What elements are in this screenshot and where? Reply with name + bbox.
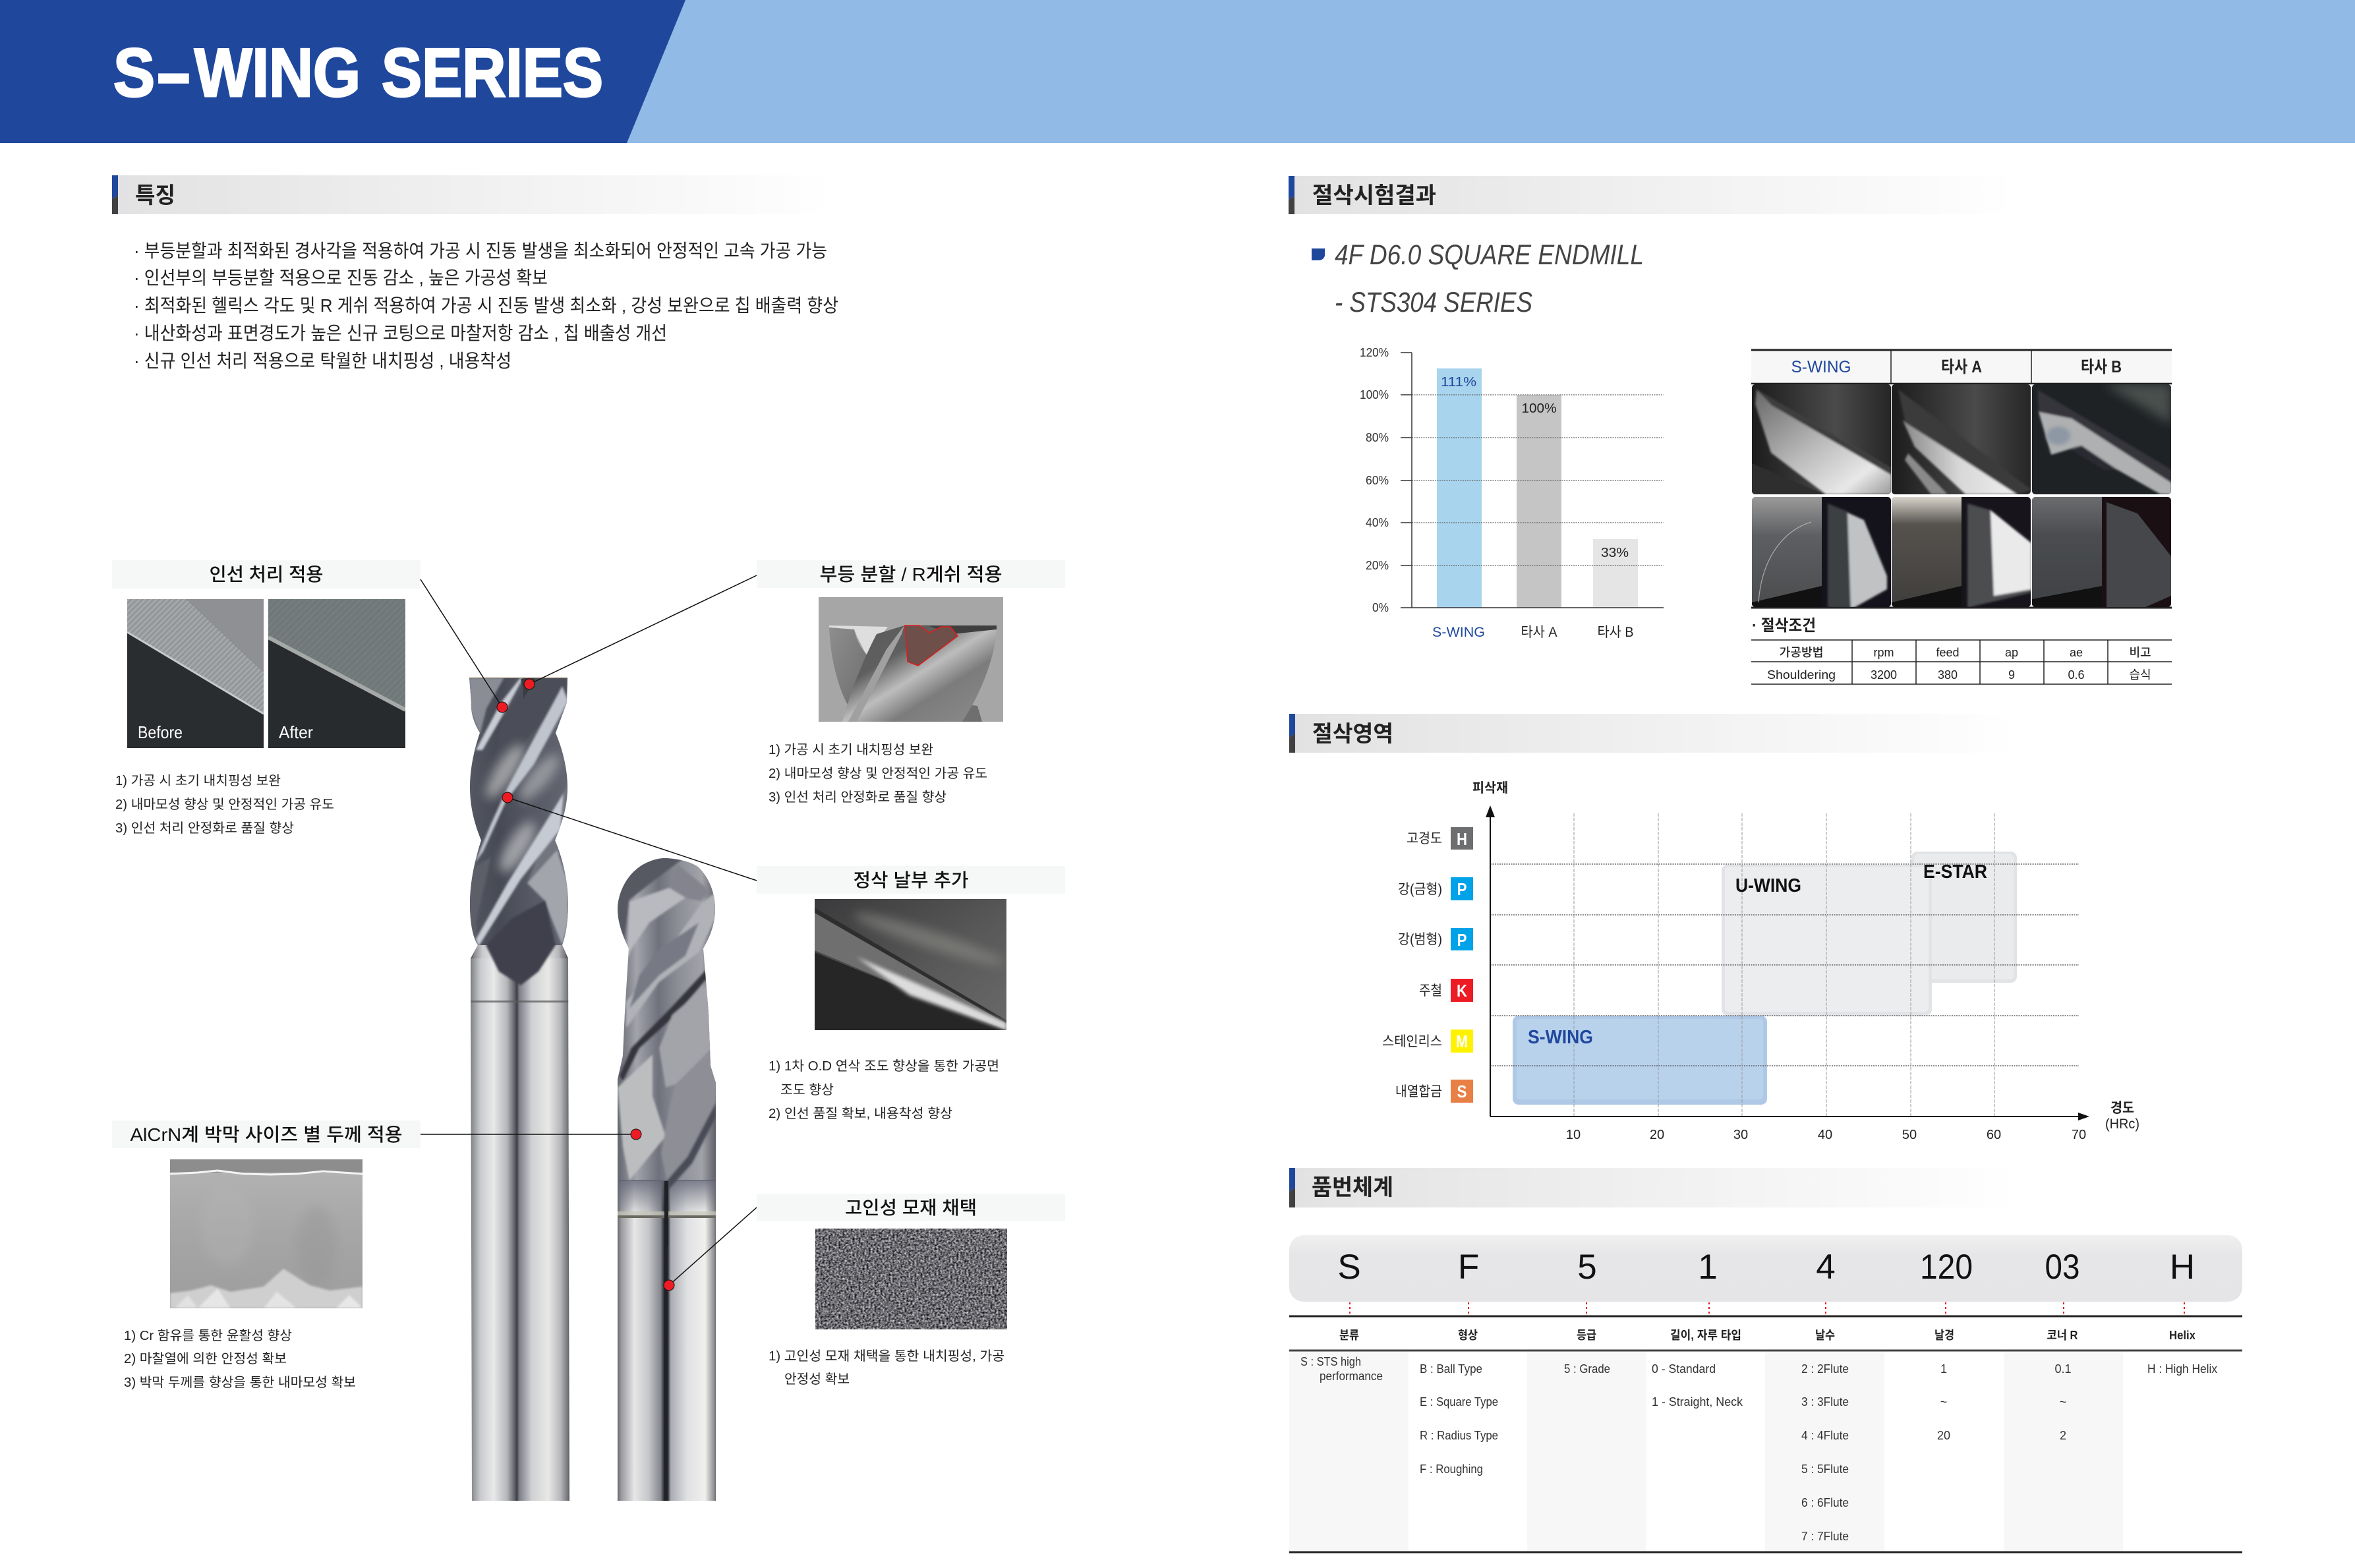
text: substrate benefits: [769, 1349, 1004, 1387]
part number table: Helix: [2169, 1329, 2195, 1342]
text: edge treatment benefits: 3) 인선 처리 안정화로 품질 향상: [115, 821, 294, 836]
heading: cutting test results: [1289, 176, 2014, 214]
part number table: 0 - Standard: [1652, 1362, 1716, 1376]
heading: features: [112, 175, 830, 214]
bar chart: 111%: [1441, 375, 1476, 390]
part number table: [1289, 1316, 2242, 1552]
material badges: [1451, 827, 1473, 1103]
part number code bar: [1289, 1235, 2242, 1302]
title: SERIES: [382, 35, 603, 111]
callout heading: unequal division: 부등 분할 / R게쉬 적용: [820, 564, 1002, 585]
red connector lines: [1350, 1302, 2184, 1316]
material badges: P: [1457, 879, 1467, 899]
hardness scale: 50: [1902, 1128, 1917, 1142]
leader lines and red markers: [421, 575, 757, 1291]
hardness scale: 60: [1987, 1128, 2001, 1142]
part number table: 길이, 자루 타입: [1670, 1329, 1741, 1342]
text: finishing edge benefits: 1) 1차 O.D 연삭 조도 향상을 통한 가공면: [769, 1059, 999, 1074]
material labels: 고경도: [1407, 831, 1442, 846]
feature bullet list: · 부등분할과 최적화된 경사각을 적용하여 가공 시 진동 발생을 최소화되어 안정적인 고속 가공 가능: [134, 241, 827, 261]
part number table: 날경: [1934, 1329, 1954, 1342]
bar chart: 20%: [1366, 559, 1389, 572]
image: square end mill: [468, 676, 571, 1502]
material labels: 스테인리스: [1382, 1034, 1442, 1049]
header banner: [0, 0, 2355, 143]
text: unequal division benefits: 3) 인선 처리 안정화로 품질 향상: [769, 790, 946, 805]
image: 3D model with highlighted gash: [819, 597, 1003, 722]
feature bullet list: · 인선부의 부등분할 적용으로 진동 감소 , 높은 가공성 확보: [134, 268, 548, 288]
text: edge treatment benefits: 1) 가공 시 초기 내치핑성 보완: [115, 773, 281, 788]
bar chart: 120%: [1360, 346, 1389, 359]
photo: before: [127, 599, 264, 748]
label: before: Before: [138, 722, 183, 742]
text: coating benefits: 2) 마찰열에 의한 안정성 확보: [124, 1351, 287, 1366]
part number table: 날수: [1815, 1329, 1835, 1342]
bar chart: 60%: [1366, 474, 1389, 487]
range: E-STAR box: [1911, 852, 2017, 983]
text: finishing edge benefits: 2) 인선 품질 확보, 내용착성 향상: [769, 1106, 952, 1121]
feature bullet list: · 최적화된 헬릭스 각도 및 R 게쉬 적용하여 가공 시 진동 발생 최소화 , 강성 보완으로 칩 배출력 향상: [134, 295, 838, 316]
photo: S-WING rake face: [1752, 384, 1892, 494]
title: WING: [194, 35, 361, 111]
heading: features: 특징: [135, 183, 175, 208]
heading: cutting range: 절삭영역: [1312, 722, 1393, 747]
part number table: 1: [1940, 1362, 1947, 1376]
photo: S-WING end face: [1752, 497, 1891, 608]
part number table: 7 : 7Flute: [1801, 1530, 1849, 1543]
material badges: P: [1457, 930, 1467, 950]
cutting conditions table: rpm: [1873, 646, 1894, 659]
cutting conditions table: 9: [2008, 668, 2015, 682]
part number table: F : Roughing: [1420, 1463, 1483, 1476]
range labels: [1528, 861, 1987, 1048]
text: unequal division benefits: [769, 742, 987, 805]
range chart: [1382, 780, 2139, 1142]
bar chart: 33%: [1601, 546, 1629, 560]
comparison photo table: [1751, 350, 2172, 608]
callout heading: coating: AlCrN계 박막 사이즈 별 두께 적용: [131, 1124, 402, 1145]
text: finishing edge benefits: [769, 1059, 999, 1121]
photo: finishing edge: [815, 899, 1007, 1030]
panel: part number system: [1289, 1168, 2242, 1552]
callout heading: unequal division: [757, 560, 1065, 588]
cutting conditions table: feed: [1936, 646, 1960, 659]
cutting conditions table: [1751, 617, 2172, 684]
part number table: 등급: [1577, 1329, 1596, 1342]
part number table: 형상: [1458, 1329, 1478, 1342]
panel: cutting range: [1289, 714, 2139, 1142]
part number table: performance: [1320, 1370, 1383, 1383]
material labels: [1382, 831, 1442, 1099]
panel: coating: [112, 1120, 421, 1390]
bar chart: 0%: [1372, 601, 1389, 614]
bar chart: 80%: [1366, 431, 1389, 444]
arrowheads: [1486, 805, 2089, 1120]
comparison photo table: 타사 A: [1941, 358, 1982, 376]
callout heading: edge treatment: [112, 560, 421, 589]
text: coating benefits: 3) 박막 두께를 향상을 통한 내마모성 확보: [124, 1375, 356, 1390]
photo: coating cross-section: [170, 1159, 363, 1308]
cutting conditions table: ae: [2070, 646, 2083, 659]
hardness scale: 30: [1733, 1128, 1748, 1142]
part number table: B : Ball Type: [1420, 1362, 1482, 1376]
bar chart: 타사 A: [1521, 625, 1557, 640]
hardness scale: [1566, 1101, 2139, 1142]
panel: features: [112, 175, 838, 371]
bar chart: 100%: [1521, 401, 1557, 416]
cutting conditions table: · 절삭조건: [1752, 617, 1816, 635]
range: S-WING box: [1513, 1016, 1767, 1105]
text: coating benefits: [124, 1328, 356, 1390]
panel: unequal division: [757, 560, 1065, 805]
hardness scale: 10: [1566, 1128, 1581, 1142]
heading: cutting test results: 절삭시험결과: [1312, 183, 1436, 208]
hardness scale: 70: [2072, 1128, 2086, 1142]
photo: competitor B end face: [2032, 497, 2171, 608]
panel: cutting test results: [1289, 176, 2172, 684]
material labels: 내열합금: [1395, 1084, 1442, 1099]
subtitle: 4F D6.0 SQUARE ENDMILL: [1335, 239, 1644, 271]
label: after: After: [279, 722, 313, 742]
part number code bar: H: [2170, 1248, 2195, 1287]
cutting conditions table: 습식: [2129, 668, 2151, 682]
part number table: 5 : 5Flute: [1801, 1463, 1849, 1476]
part number code bar: F: [1458, 1248, 1479, 1287]
bar chart: 타사 B: [1598, 625, 1633, 640]
range chart: 피삭재: [1472, 780, 1508, 796]
callout heading: tough substrate: [757, 1194, 1065, 1221]
panel: edge treatment: [112, 560, 421, 836]
text: finishing edge benefits: 조도 향상: [780, 1082, 834, 1097]
panel: finishing edge: [757, 866, 1065, 1121]
image: ball end mill: [616, 857, 717, 1503]
part number table: 5 : Grade: [1564, 1362, 1610, 1376]
part number table: 코너 R: [2047, 1329, 2078, 1342]
range labels: E-STAR: [1923, 861, 1987, 883]
part number table: H : High Helix: [2147, 1362, 2217, 1376]
part number table: R : Radius Type: [1420, 1429, 1498, 1442]
hardness scale: 경도: [2110, 1101, 2134, 1116]
material labels: 주철: [1419, 983, 1442, 999]
subtitle: [1312, 239, 1644, 318]
heading: part number system: [1289, 1168, 2014, 1207]
part number table: ~: [2060, 1395, 2066, 1408]
bar chart: 100%: [1360, 388, 1389, 401]
photo: after: [268, 599, 405, 748]
heading: cutting range: [1289, 714, 2014, 753]
part number table: 4 : 4Flute: [1801, 1429, 1849, 1442]
part number table: ~: [1940, 1395, 1947, 1408]
hardness scale: (HRc): [2105, 1117, 2139, 1132]
title: -: [156, 35, 192, 111]
photo: competitor A end face: [1892, 497, 2031, 608]
cutting conditions table: 3200: [1871, 668, 1897, 682]
text: substrate benefits: 1) 고인성 모재 채택을 통한 내치핑성, 가공: [769, 1349, 1004, 1364]
hardness scale: 40: [1818, 1128, 1832, 1142]
photo: competitor B rake face: [2032, 384, 2172, 494]
callout heading: coating: [112, 1120, 421, 1148]
title: S: [113, 35, 155, 111]
cutting conditions table: 0.6: [2068, 668, 2085, 682]
photo: substrate texture: [815, 1229, 1007, 1329]
part number table: 2 : 2Flute: [1801, 1362, 1849, 1376]
material badges: K: [1457, 981, 1467, 1001]
part number table: 1 - Straight, Neck: [1652, 1395, 1743, 1408]
text: edge treatment benefits: 2) 내마모성 향상 및 안정적인 가공 유도: [115, 797, 334, 812]
range labels: U-WING: [1735, 875, 1801, 896]
text: unequal division benefits: 1) 가공 시 초기 내치핑성 보완: [769, 742, 933, 757]
part number code bar: 4: [1816, 1248, 1836, 1287]
comparison photo table: S-WING: [1791, 358, 1851, 376]
cutting conditions table: 비고: [2129, 646, 2151, 659]
material badges: H: [1457, 829, 1467, 849]
bar chart: S-WING: [1432, 625, 1485, 640]
photo: competitor A rake face: [1892, 384, 2031, 494]
callout heading: finishing edge: [757, 866, 1065, 894]
text: edge treatment benefits: [115, 773, 334, 836]
feature bullet list: · 내산화성과 표면경도가 높은 신규 코팅으로 마찰저항 감소 , 칩 배출성 개선: [134, 323, 667, 343]
part number table: 2: [2060, 1429, 2066, 1442]
material labels: 강(범형): [1398, 932, 1442, 947]
subtitle: - STS304 SERIES: [1335, 287, 1532, 318]
part number table: S : STS high: [1300, 1355, 1361, 1368]
bar chart: 40%: [1366, 516, 1389, 529]
callout heading: edge treatment: 인선 처리 적용: [210, 564, 323, 585]
material labels: 강(금형): [1398, 882, 1442, 897]
hardness scale: 20: [1650, 1128, 1664, 1142]
text: unequal division benefits: 2) 내마모성 향상 및 안정적인 가공 유도: [769, 766, 987, 781]
part number table: E : Square Type: [1420, 1395, 1498, 1408]
heading: part number system: 품번체계: [1312, 1175, 1393, 1200]
part number table: 6 : 6Flute: [1801, 1496, 1849, 1509]
part number code bar: 1: [1698, 1248, 1718, 1287]
text: coating benefits: 1) Cr 함유를 통한 윤활성 향상: [124, 1328, 292, 1343]
panel: tough substrate: [757, 1194, 1065, 1387]
part number table: 3 : 3Flute: [1801, 1395, 1849, 1408]
part number code bar: 5: [1577, 1248, 1597, 1287]
feature bullet list: · 신규 인선 처리 적용으로 탁월한 내치핑성 , 내용착성: [134, 351, 511, 371]
text: substrate benefits: 안정성 확보: [784, 1372, 850, 1387]
part number table: 분류: [1339, 1329, 1359, 1342]
cutting conditions table: 380: [1938, 668, 1958, 682]
range labels: S-WING: [1528, 1027, 1593, 1048]
part number code bar: S: [1337, 1248, 1361, 1287]
cutting conditions table: 가공방법: [1780, 646, 1823, 659]
part number code bar: 120: [1920, 1248, 1973, 1287]
axes: [1490, 816, 2079, 1117]
cutting conditions table: ap: [2005, 646, 2018, 659]
part number table: 0.1: [2054, 1362, 2072, 1376]
callout heading: tough substrate: 고인성 모재 채택: [845, 1198, 977, 1218]
range: U-WING box: [1722, 865, 1932, 1016]
part number code bar: 03: [2045, 1248, 2080, 1287]
material badges: S: [1457, 1082, 1467, 1101]
part number table: 20: [1937, 1429, 1950, 1442]
bar chart: [1360, 346, 1664, 640]
callout heading: finishing edge: 정삭 날부 추가: [853, 870, 969, 890]
feature bullet list: [134, 241, 838, 371]
cutting conditions table: Shouldering: [1767, 668, 1836, 682]
comparison photo table: 타사 B: [2081, 358, 2122, 376]
material badges: M: [1456, 1031, 1468, 1051]
